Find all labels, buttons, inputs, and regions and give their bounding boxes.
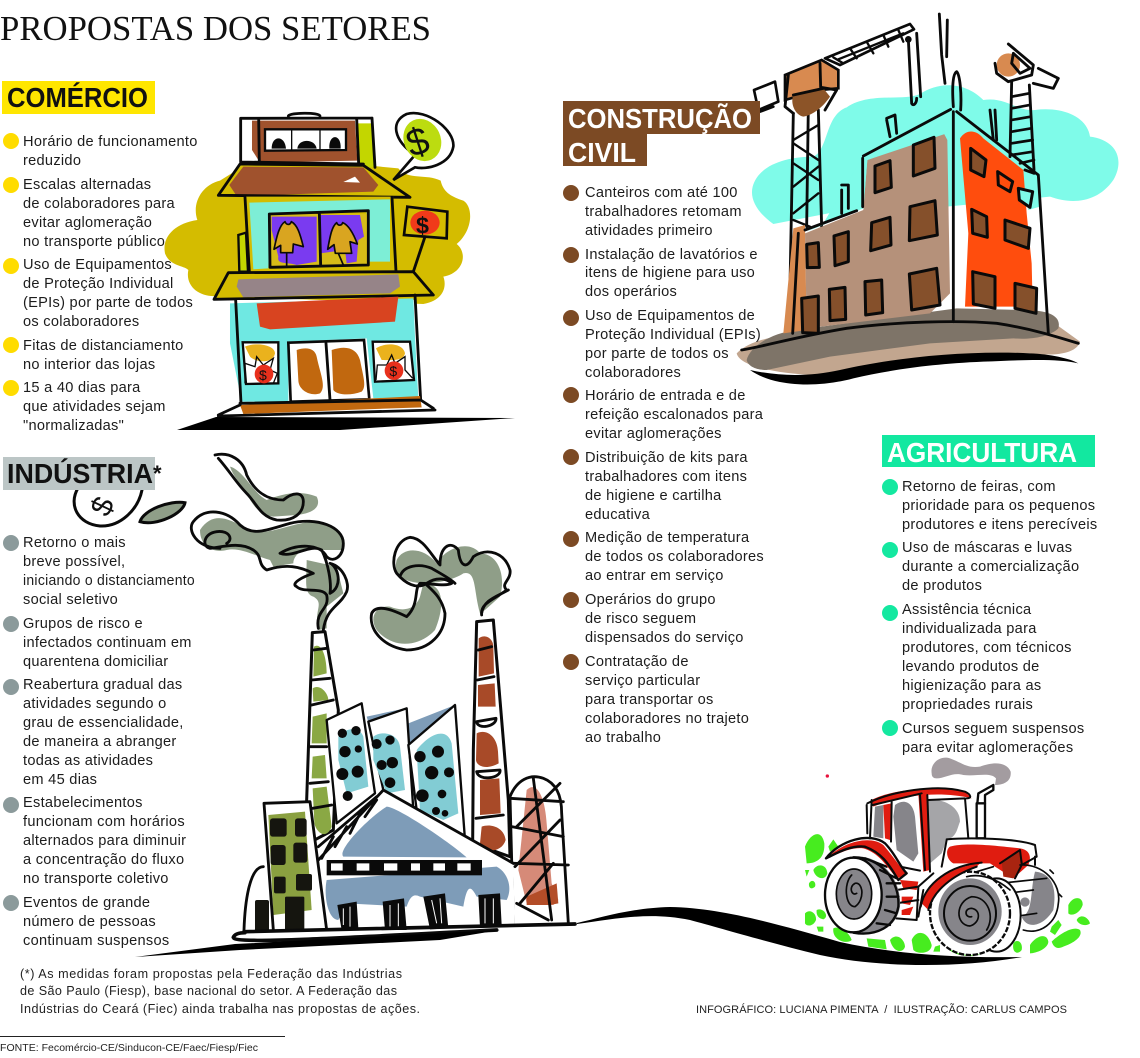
factory base — [233, 924, 575, 940]
store upper floor with window — [238, 197, 396, 272]
heading: comércio: COMÉRCIO — [7, 82, 148, 113]
list: construção civil: atividades primeiro — [585, 223, 713, 239]
right tower crane — [995, 44, 1058, 170]
store top storey — [241, 113, 375, 167]
list: indústria — [23, 535, 195, 949]
list: agricultura: de produtos — [902, 578, 982, 594]
list: indústria: todas as atividades — [23, 753, 153, 769]
bullets: indústria — [3, 535, 19, 911]
list: construção civil: refeição escalonados para — [585, 407, 764, 423]
front fender — [921, 863, 1010, 910]
list: agricultura: Assistência técnica — [902, 602, 1032, 618]
puff near heading — [140, 502, 185, 523]
engine hood — [940, 838, 1062, 933]
building left wing — [783, 72, 997, 333]
list: comércio: que atividades sejam — [23, 399, 166, 415]
axle parts — [896, 873, 933, 920]
list: construção civil: ao entrar em serviço — [585, 568, 724, 584]
ground wedge — [135, 930, 500, 957]
shadow under store — [177, 417, 515, 430]
list: indústria: Reabertura gradual das — [23, 677, 182, 693]
list: comércio: de colaboradores para — [23, 196, 176, 212]
cab — [867, 788, 972, 872]
list: construção civil: educativa — [585, 507, 651, 523]
list: construção civil: Medição de temperatura — [585, 530, 750, 546]
red dot — [826, 774, 829, 778]
list: indústria: Estabelecimentos — [23, 795, 143, 811]
list: indústria: em 45 dias — [23, 772, 97, 788]
store ground floor: $ — [389, 363, 397, 379]
list: agricultura: propriedades rurais — [902, 697, 1033, 713]
list: construção civil: serviço particular — [585, 673, 700, 689]
ground swoosh — [577, 907, 1022, 965]
list: indústria: grau de essencialidade, — [23, 715, 184, 731]
list: comércio — [23, 134, 198, 434]
exhaust smoke — [931, 758, 1011, 785]
icon: dollar coin in smoke — [74, 488, 142, 526]
price sign — [404, 207, 447, 272]
footnote: (*) As medidas foram propostas pela Federação das Indústrias — [20, 967, 402, 981]
list: comércio: Horário de funcionamento — [23, 134, 198, 150]
rear fender — [826, 838, 907, 880]
list: comércio: Uso de Equipamentos — [23, 257, 172, 273]
list: construção civil: trabalhadores retomam — [585, 204, 742, 220]
bullets: comércio — [3, 133, 19, 396]
list: construção civil: itens de higiene para uso — [585, 265, 755, 281]
list: agricultura — [902, 479, 1098, 756]
list: comércio: de Proteção Individual — [23, 276, 174, 292]
list: construção civil: de higiene e cartilha — [585, 488, 722, 504]
list: construção civil: colaboradores — [585, 365, 681, 381]
panel: construção civil — [563, 101, 764, 746]
list: construção civil: por parte de todos os — [585, 346, 729, 362]
store lower roof — [214, 272, 433, 299]
list: comércio: Fitas de distanciamento — [23, 338, 184, 354]
list: indústria: infectados continuam em — [23, 635, 192, 651]
front wheel — [930, 872, 1021, 955]
store base — [218, 396, 435, 416]
list: comércio: no transporte público — [23, 234, 165, 250]
left tower crane — [754, 14, 947, 320]
footnote: de São Paulo (Fiesp), base nacional do setor. A Federação das — [20, 984, 397, 998]
list: construção civil: de risco seguem — [585, 611, 696, 627]
price sign: $ — [416, 212, 429, 238]
left chimney — [307, 632, 338, 843]
list: agricultura: higienização para as — [902, 678, 1041, 694]
ground — [737, 308, 1080, 385]
list: agricultura: Uso de máscaras e luvas — [902, 540, 1072, 556]
list: agricultura: produtores e itens perecíveis — [902, 517, 1098, 533]
list: construção civil: Distribuição de kits para — [585, 450, 748, 466]
list: construção civil: Canteiros com até 100 — [585, 185, 738, 201]
bullets: construção civil — [563, 185, 579, 670]
list: indústria: alternados para diminuir — [23, 833, 186, 849]
building right wing — [957, 112, 1048, 333]
list: indústria: social seletivo — [23, 592, 118, 608]
list: agricultura: Retorno de feiras, com — [902, 479, 1056, 495]
icon: dollar coin in smoke: $ — [84, 492, 122, 521]
list: construção civil: Instalação de lavatórios e — [585, 247, 758, 263]
list: indústria: número de pessoas — [23, 914, 156, 930]
left smoke — [191, 454, 348, 630]
list: construção civil: ao trabalho — [585, 730, 661, 746]
list: indústria: no transporte coletivo — [23, 871, 169, 887]
list: indústria: funcionam com horários — [23, 814, 185, 830]
ground line — [742, 322, 1078, 350]
list: agricultura: levando produtos de — [902, 659, 1040, 675]
bullets: agricultura — [882, 479, 898, 736]
list: agricultura: durante a comercialização — [902, 559, 1079, 575]
heading: construção civil: CONSTRUÇÃO — [568, 103, 752, 134]
list: agricultura: produtores, com técnicos — [902, 640, 1072, 656]
list: comércio: reduzido — [23, 153, 81, 169]
illustration: factory — [140, 454, 575, 940]
list: comércio: no interior das lojas — [23, 357, 155, 373]
heading: construção civil: CIVIL — [568, 137, 636, 168]
centre panels — [327, 703, 465, 840]
list: construção civil: Operários do grupo — [585, 592, 716, 608]
list: construção civil: trabalhadores com itens — [585, 469, 747, 485]
footnote — [20, 967, 420, 1016]
list: indústria: atividades segundo o — [23, 696, 167, 712]
rear wheel — [825, 857, 900, 934]
list: construção civil — [585, 185, 764, 746]
right chimney — [473, 620, 510, 857]
list: agricultura: individualizada para — [902, 621, 1037, 637]
list: construção civil: dos operários — [585, 284, 677, 300]
list: indústria: de maneira a abranger — [23, 734, 177, 750]
list: construção civil: evitar aglomerações — [585, 426, 722, 442]
list: comércio: 15 a 40 dias para — [23, 380, 141, 396]
credits: INFOGRÁFICO: LUCIANA PIMENTA / ILUSTRAÇÃO: CARLUS CAMPOS — [696, 1003, 1067, 1016]
list: construção civil: Uso de Equipamentos de — [585, 308, 755, 324]
store ground floor — [230, 295, 421, 403]
illustration: construction building — [737, 14, 1118, 385]
list: indústria: iniciando o distanciamento — [23, 573, 195, 589]
list: construção civil: dispensados do serviço — [585, 630, 744, 646]
list: indústria: breve possível, — [23, 554, 125, 570]
green bushes — [805, 834, 1090, 956]
list: construção civil: Horário de entrada e de — [585, 388, 746, 404]
aqua cloud — [752, 85, 1118, 224]
title: PROPOSTAS DOS SETORES — [0, 9, 431, 48]
list: comércio: os colaboradores — [23, 314, 139, 330]
heading: indústria: * — [153, 461, 162, 486]
speech bubble with dollar: $ — [401, 119, 435, 166]
heading: construção civil — [563, 101, 760, 168]
left wing windows — [802, 137, 940, 333]
panel: comércio — [2, 81, 198, 434]
list: agricultura: Cursos seguem suspensos — [902, 721, 1084, 737]
list: construção civil: Contratação de — [585, 654, 689, 670]
list: indústria: Retorno o mais — [23, 535, 126, 551]
list: comércio: (EPIs) por parte de todos — [23, 295, 193, 311]
list: comércio: Escalas alternadas — [23, 177, 151, 193]
heading: agricultura: AGRICULTURA — [887, 437, 1077, 468]
green tower — [244, 802, 327, 932]
list: agricultura: para evitar aglomerações — [902, 740, 1073, 756]
exhaust pipe — [977, 785, 993, 838]
speech bubble with dollar — [393, 113, 453, 180]
list: construção civil: para transportar os — [585, 692, 714, 708]
list: agricultura: prioridade para os pequenos — [902, 498, 1095, 514]
right smoke — [371, 537, 510, 650]
main hall — [318, 790, 515, 930]
store background blob — [164, 166, 470, 304]
list: indústria: Grupos de risco e — [23, 616, 143, 632]
illustration: store — [164, 113, 470, 416]
heading: indústria: INDÚSTRIA — [7, 458, 153, 489]
list: indústria: Eventos de grande — [23, 895, 150, 911]
store ground floor: $ — [259, 367, 267, 383]
store upper roof — [218, 164, 410, 197]
arch tower — [510, 777, 568, 923]
list: construção civil: Proteção Individual (EPIs) — [585, 327, 761, 343]
list: comércio: "normalizadas" — [23, 418, 124, 434]
panel: agricultura — [882, 435, 1098, 756]
right wing windows — [971, 148, 1037, 313]
footnote: Indústrias do Ceará (Fiec) ainda trabalha nas propostas de ações. — [20, 1002, 420, 1016]
list: indústria: quarentena domiciliar — [23, 654, 168, 670]
list: comércio: evitar aglomeração — [23, 215, 152, 231]
list: construção civil: de todos os colaboradores — [585, 549, 764, 565]
illustration: tractor — [805, 758, 1090, 956]
list: indústria: continuam suspensos — [23, 933, 169, 949]
panel: indústria — [3, 457, 195, 949]
list: indústria: a concentração do fluxo — [23, 852, 184, 868]
source: FONTE: Fecomércio-CE/Sinducon-CE/Faec/Fiesp/Fiec — [0, 1042, 258, 1054]
list: construção civil: colaboradores no trajeto — [585, 711, 749, 727]
